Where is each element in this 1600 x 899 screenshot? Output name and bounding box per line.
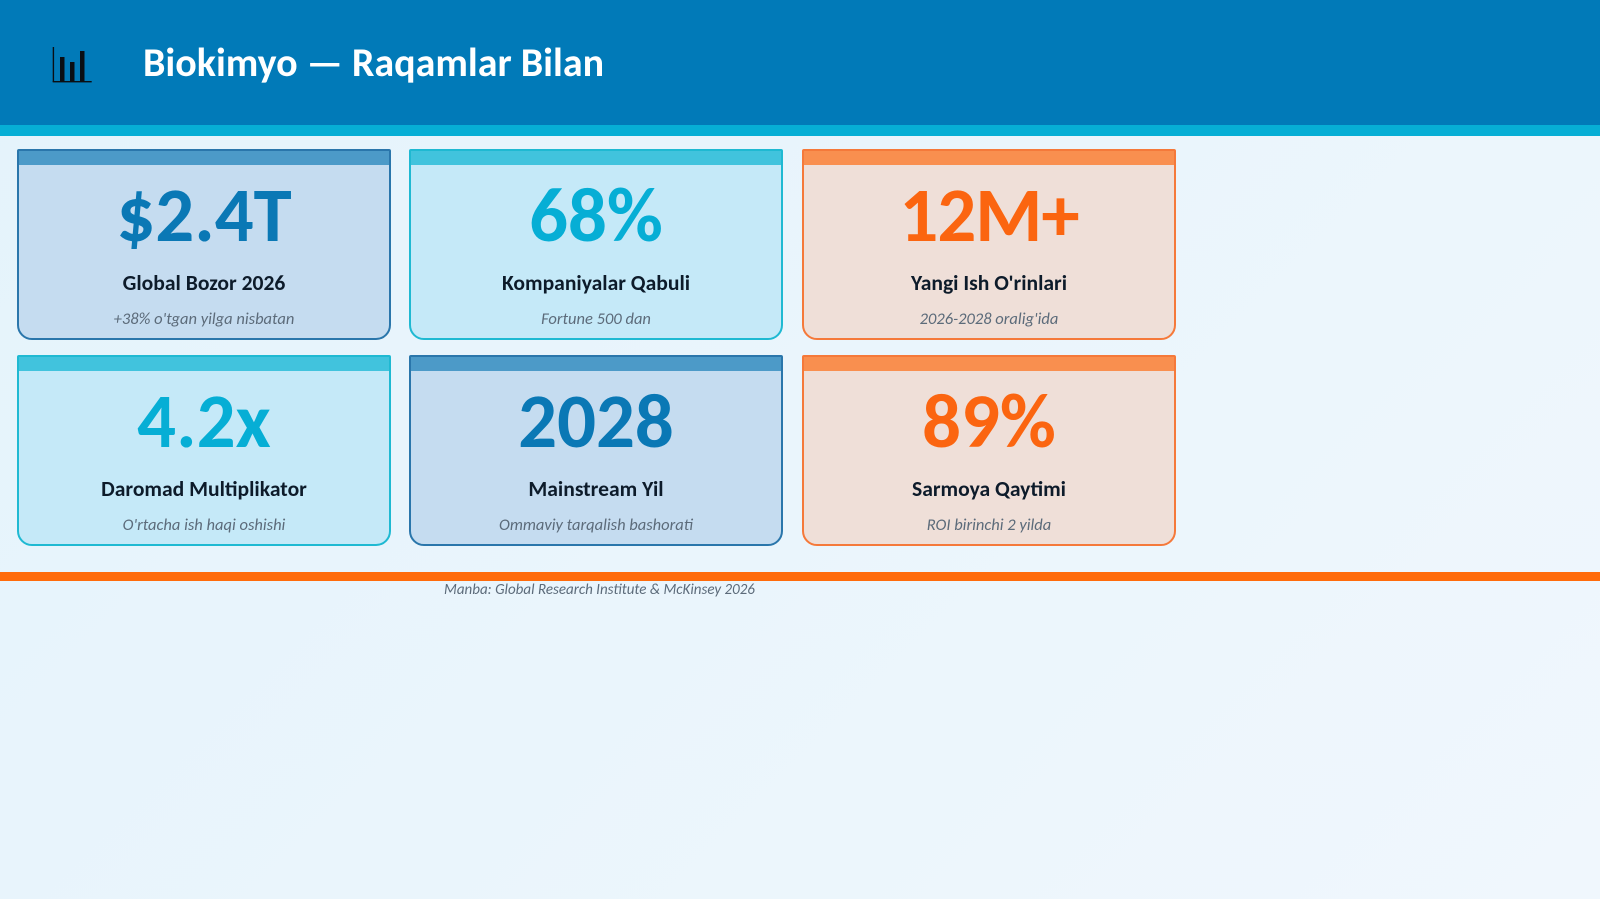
panel: company adoption: Kompaniyalar Qabuli <box>502 269 690 296</box>
title: Biokimyo — Raqamlar Bilan <box>143 38 604 87</box>
panel: income multiplier: 4.2x <box>137 374 271 468</box>
panel: new jobs: Yangi Ish O'rinlari <box>911 269 1067 296</box>
panel: new jobs: 12M+ <box>899 168 1079 262</box>
header accent band <box>0 125 1600 136</box>
panel: return on investment: Sarmoya Qaytimi <box>912 475 1066 502</box>
panel: global market <box>17 149 391 340</box>
panel: global market: Global Bozor 2026 <box>123 269 285 296</box>
panel: income multiplier: Daromad Multiplikator <box>101 475 307 502</box>
panel: mainstream year <box>409 355 783 546</box>
source note: Manba: Global Research Institute & McKinsey 2026 <box>444 581 755 599</box>
icon: bar chart <box>52 47 92 82</box>
panel: new jobs: 2026-2028 oralig'ida <box>920 309 1058 329</box>
footer accent line <box>0 572 1600 581</box>
panel: income multiplier <box>17 355 391 546</box>
panel: return on investment <box>802 355 1176 546</box>
panel: global market: $2.4T <box>116 168 292 262</box>
panel: mainstream year: Ommaviy tarqalish bashorati <box>499 515 693 535</box>
panel: return on investment: 89% <box>922 374 1056 468</box>
panel: mainstream year: Mainstream Yil <box>528 475 664 502</box>
panel: global market: +38% o'tgan yilga nisbatan <box>114 309 294 329</box>
panel: new jobs <box>802 149 1176 340</box>
panel: return on investment: ROI birinchi 2 yilda <box>927 515 1051 535</box>
panel: mainstream year: 2028 <box>518 374 674 468</box>
panel: company adoption <box>409 149 783 340</box>
header banner <box>0 0 1600 125</box>
panel: company adoption: Fortune 500 dan <box>541 309 651 329</box>
panel: income multiplier: O'rtacha ish haqi oshishi <box>123 515 285 535</box>
panel: company adoption: 68% <box>529 168 663 262</box>
